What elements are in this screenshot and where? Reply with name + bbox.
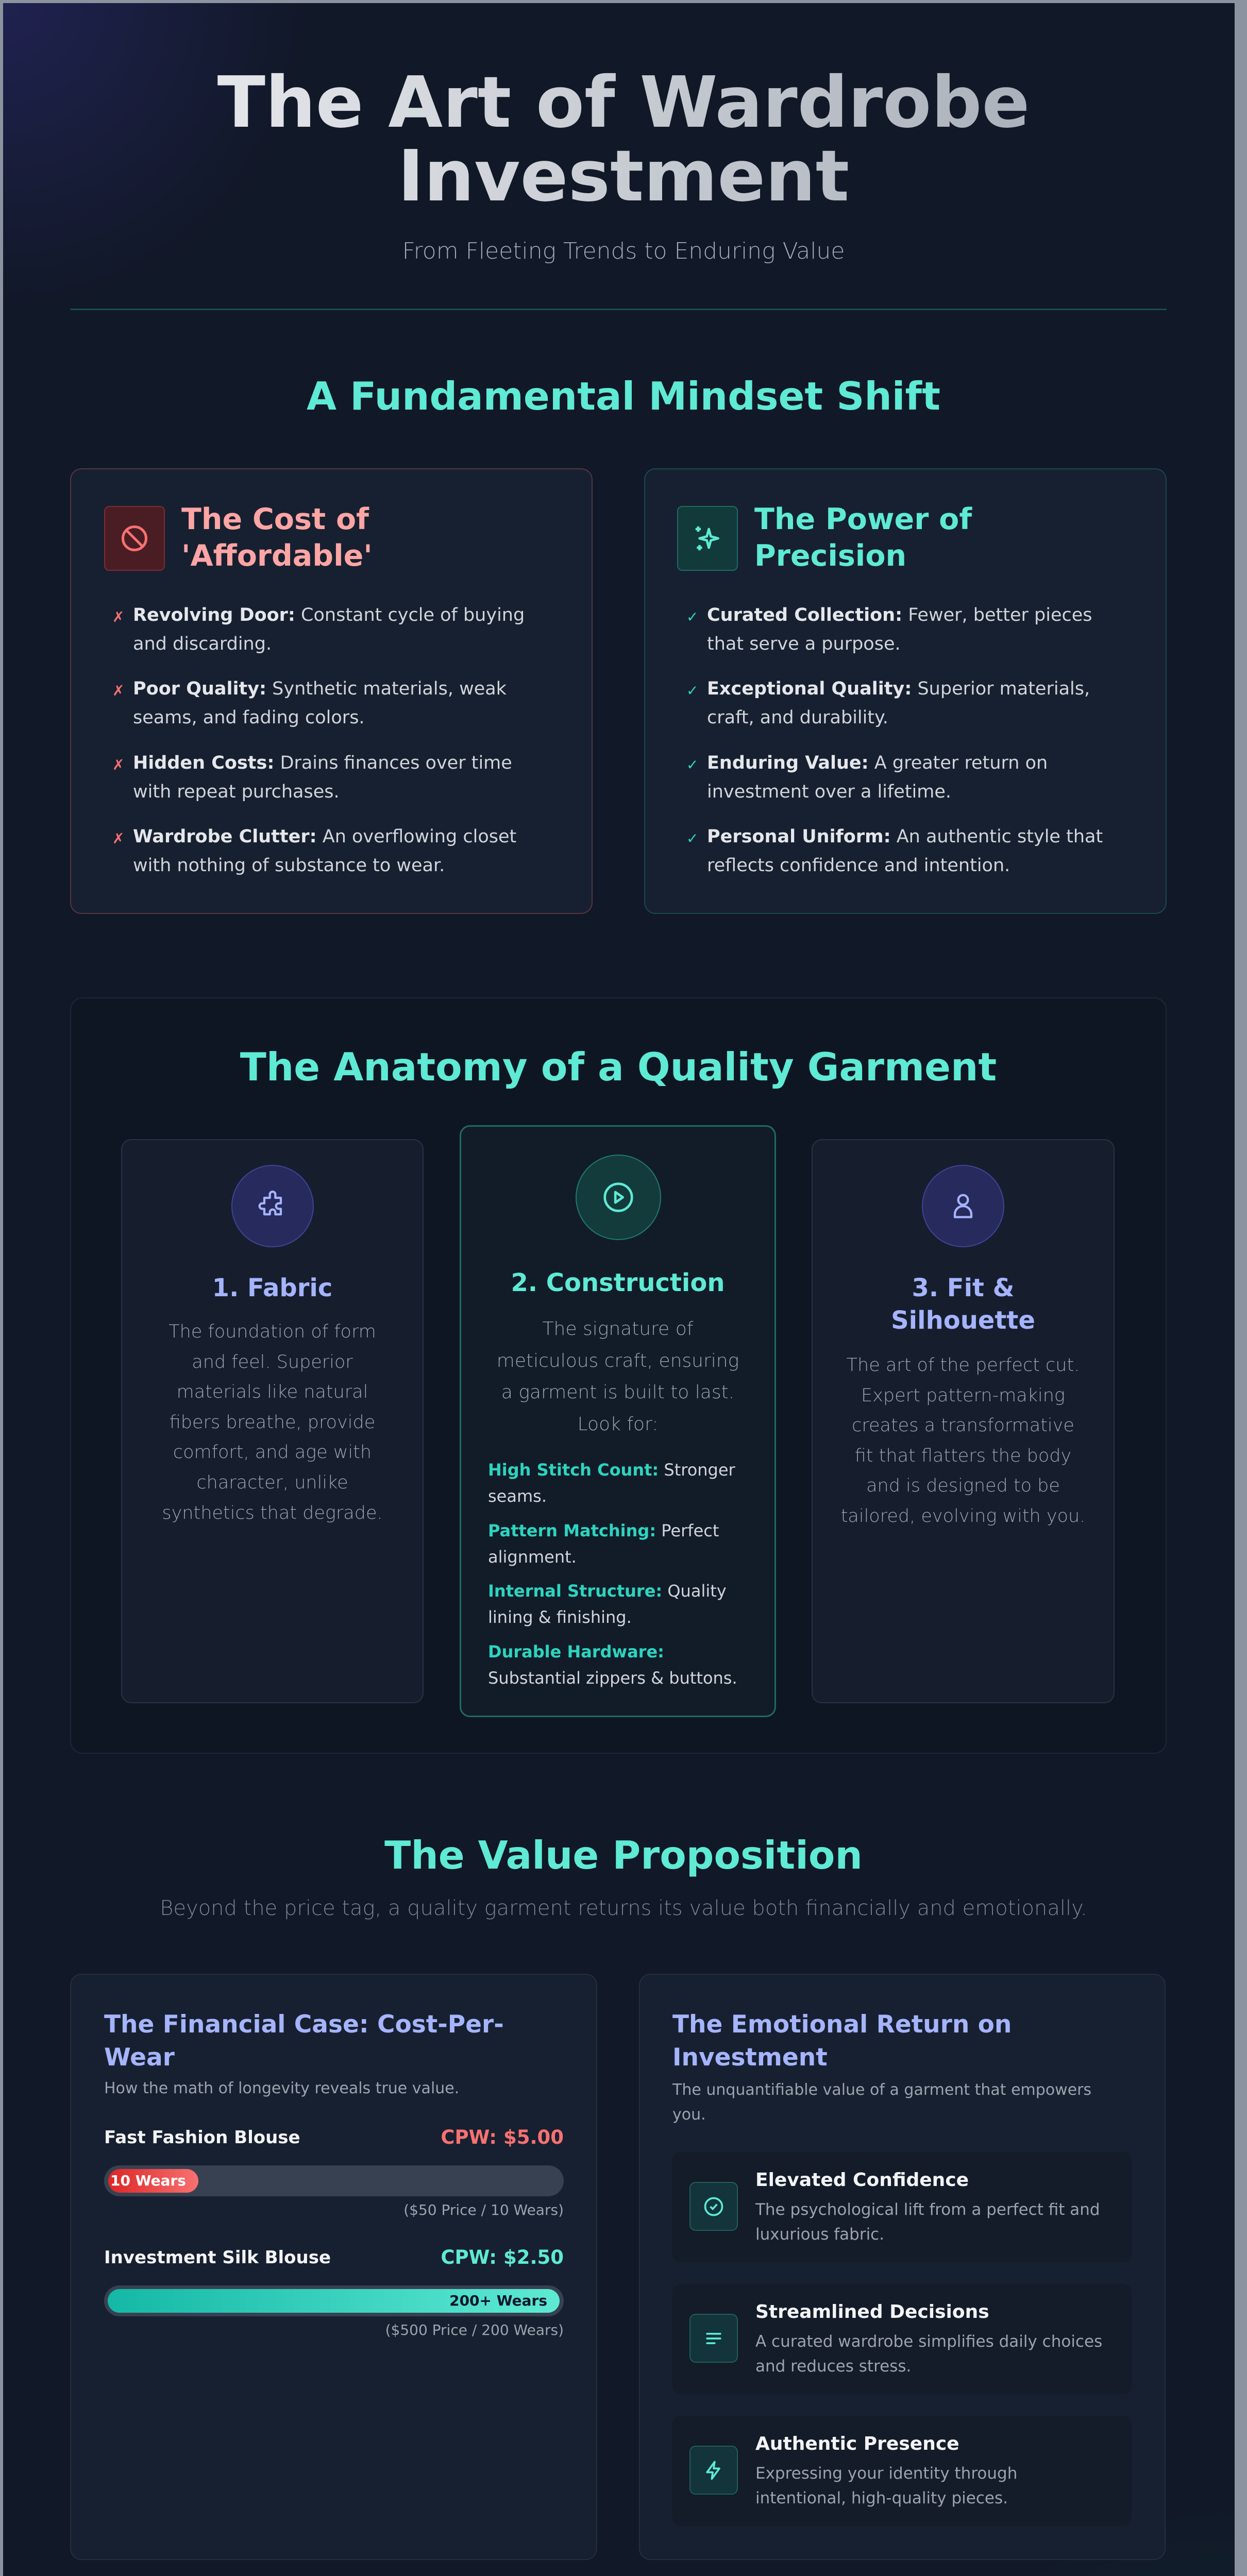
icon: check circle: [689, 2182, 738, 2231]
panel: emotional return: [639, 1974, 1166, 2560]
item: decisions: [672, 2284, 1132, 2394]
bar: 10 Wears: [110, 2172, 186, 2189]
heading: [104, 2010, 504, 2072]
heading: Wear: [104, 2043, 175, 2072]
card: construction: [460, 1125, 776, 1717]
panel: cost of affordable: ✗: [112, 682, 124, 699]
icon: bolt: [689, 2446, 738, 2495]
heading: Precision: [754, 539, 906, 573]
icon: ban: [104, 506, 165, 571]
title: [891, 1274, 1035, 1335]
list: Poor Quality: Synthetic materials, weak: [133, 679, 507, 699]
list: and discarding.: [133, 634, 272, 654]
panel: power of precision: ✓: [686, 756, 698, 773]
heading: value proposition: The Value Proposition: [384, 1833, 863, 1878]
card: construction: alignment.: [488, 1547, 577, 1567]
heading: mindset shift: A Fundamental Mindset Shift: [307, 374, 940, 419]
list: reflects confidence and intention.: [707, 855, 1010, 876]
row: silk: Investment Silk Blouse: [104, 2247, 331, 2268]
list: craft, and durability.: [707, 707, 888, 728]
list: [686, 605, 1103, 876]
card: fit: [812, 1139, 1115, 1703]
row: silk: ($500 Price / 200 Wears): [385, 2321, 564, 2338]
item: presence: Authentic Presence: [755, 2433, 959, 2454]
text: [162, 1321, 383, 1523]
text: creates a transformative: [852, 1415, 1074, 1436]
sub: How the math of longevity reveals true value.: [104, 2079, 459, 2097]
text: meticulous craft, ensuring: [497, 1350, 739, 1371]
panel: power of precision: [644, 468, 1167, 914]
row: fast fashion: CPW: $5.00: [441, 2126, 564, 2148]
bar: [104, 2165, 564, 2196]
heading: The Financial Case: Cost-Per-: [104, 2010, 504, 2039]
card: fabric: [121, 1139, 424, 1703]
text: [841, 1355, 1085, 1527]
panel: financial case: [70, 1974, 597, 2560]
text: materials like natural: [177, 1382, 368, 1402]
card: construction: Internal Structure: Quality: [488, 1581, 727, 1601]
icon: lines: [689, 2314, 738, 2363]
text: The art of the perfect cut.: [847, 1355, 1080, 1376]
text: comfort, and age with: [173, 1442, 372, 1463]
title: [0, 66, 1247, 213]
item: decisions: and reduces stress.: [755, 2357, 911, 2376]
text: and is designed to be: [866, 1476, 1060, 1496]
list: Enduring Value: A greater return on: [707, 753, 1048, 773]
list: with repeat purchases.: [133, 782, 340, 802]
list: seams, and fading colors.: [133, 707, 365, 728]
title: 1. Fabric: [212, 1274, 332, 1302]
card: construction: Pattern Matching: Perfect: [488, 1521, 719, 1540]
item: presence: intentional, high-quality pieces.: [755, 2489, 1008, 2507]
title: The Art of Wardrobe: [217, 62, 1030, 144]
list: [488, 1460, 735, 1506]
text: character, unlike: [196, 1472, 348, 1493]
list: seams.: [488, 1486, 547, 1506]
sub: [672, 2081, 1091, 2124]
bar: 200+ Wears: [449, 2292, 547, 2309]
list: Revolving Door: Constant cycle of buying: [133, 605, 525, 625]
text: Expert pattern-making: [861, 1385, 1065, 1406]
heading: The Emotional Return on: [672, 2010, 1012, 2039]
title: 2. Construction: [511, 1268, 725, 1297]
row: silk: CPW: $2.50: [441, 2246, 564, 2268]
icon: sparkles: [677, 506, 738, 571]
panel: power of precision: ✓: [686, 608, 698, 625]
item: confidence: [672, 2152, 1132, 2262]
text: The foundation of form: [168, 1321, 376, 1342]
icon: user: [922, 1165, 1004, 1247]
panel: power of precision: ✓: [686, 830, 698, 847]
subtitle: From Fleeting Trends to Enduring Value: [402, 238, 845, 264]
list: Personal Uniform: An authentic style that: [707, 826, 1103, 847]
panel: cost of affordable: ✗: [112, 756, 124, 773]
item: confidence: Elevated Confidence: [755, 2170, 969, 2191]
heading: The Power of: [754, 502, 972, 536]
icon: play circle: [576, 1155, 661, 1240]
list: Exceptional Quality: Superior materials,: [707, 679, 1090, 699]
text: [497, 1318, 739, 1434]
text: a garment is built to last.: [501, 1382, 734, 1403]
bar: [104, 2285, 564, 2316]
list: with nothing of substance to wear.: [133, 855, 445, 876]
text: tailored, evolving with you.: [841, 1506, 1085, 1527]
item: decisions: A curated wardrobe simplifies daily choices: [755, 2332, 1102, 2351]
title: Silhouette: [891, 1306, 1035, 1335]
sub: you.: [672, 2106, 706, 2124]
panel: cost of affordable: ✗: [112, 608, 124, 625]
title: 3. Fit &: [912, 1274, 1015, 1302]
panel: cost of affordable: [70, 468, 593, 914]
text: and feel. Superior: [192, 1352, 353, 1372]
list: that serve a purpose.: [707, 634, 901, 654]
card: construction: Substantial zippers & buttons.: [488, 1668, 737, 1688]
text: synthetics that degrade.: [162, 1503, 383, 1523]
panel: anatomy: [70, 997, 1167, 1754]
list: Curated Collection: Fewer, better pieces: [707, 605, 1092, 625]
heading: anatomy: The Anatomy of a Quality Garment: [240, 1044, 997, 1090]
item: presence: [672, 2416, 1132, 2526]
text: fit that flatters the body: [855, 1446, 1071, 1466]
sub: The unquantifiable value of a garment that empowers: [672, 2081, 1091, 2099]
text: The signature of: [543, 1318, 693, 1340]
list: [112, 605, 525, 876]
text: fibers breathe, provide: [170, 1412, 375, 1433]
heading: Investment: [672, 2043, 828, 2072]
item: decisions: Streamlined Decisions: [755, 2301, 989, 2323]
card: construction: Durable Hardware:: [488, 1642, 664, 1662]
list: High Stitch Count: Stronger: [488, 1460, 735, 1480]
title: Investment: [398, 135, 849, 217]
row: silk: [104, 2246, 564, 2338]
heading: The Cost of: [181, 502, 369, 536]
list: Wardrobe Clutter: An overflowing closet: [133, 826, 516, 847]
subheading: Beyond the price tag, a quality garment returns its value both financially and emotionally.: [160, 1896, 1087, 1920]
heading: [181, 502, 373, 573]
heading: 'Affordable': [181, 539, 373, 573]
text: Look for:: [578, 1414, 658, 1434]
item: presence: Expressing your identity through: [755, 2464, 1017, 2483]
row: fast fashion: Fast Fashion Blouse: [104, 2127, 300, 2148]
icon: puzzle: [231, 1165, 314, 1247]
row: fast fashion: ($50 Price / 10 Wears): [403, 2201, 564, 2218]
panel: cost of affordable: ✗: [112, 830, 124, 847]
heading: [672, 2010, 1012, 2072]
heading: [754, 502, 972, 573]
item: confidence: luxurious fabric.: [755, 2225, 884, 2244]
list: Hidden Costs: Drains finances over time: [133, 753, 512, 773]
list: investment over a lifetime.: [707, 782, 951, 802]
card: construction: lining & finishing.: [488, 1607, 632, 1627]
item: confidence: The psychological lift from a perfect fit and: [755, 2200, 1100, 2219]
row: fast fashion: [104, 2126, 564, 2218]
panel: power of precision: ✓: [686, 682, 698, 699]
